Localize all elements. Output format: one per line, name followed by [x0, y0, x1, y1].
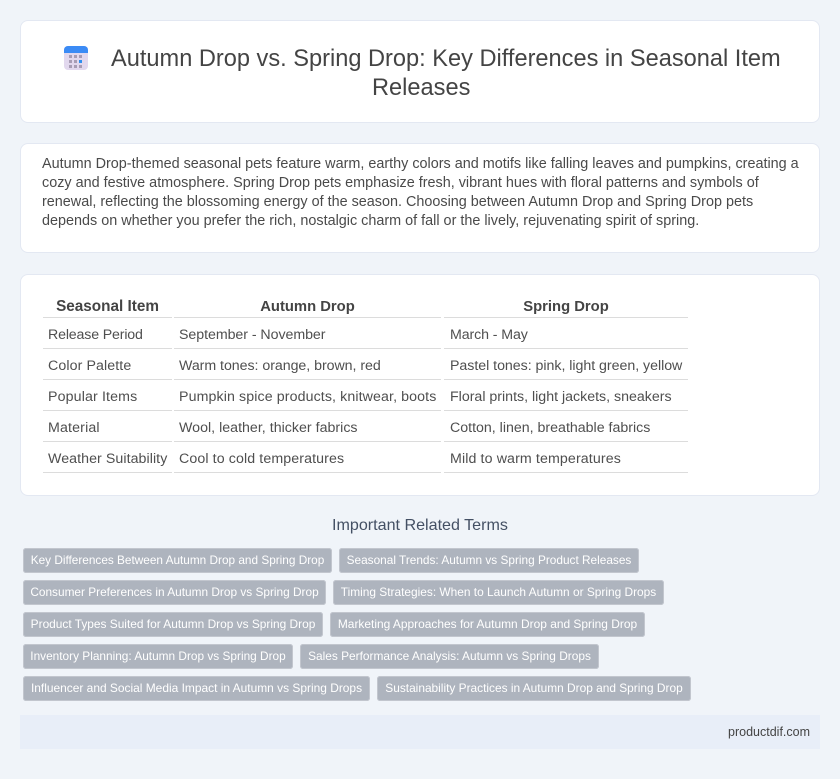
row: Popular Items: Pumpkin spice products, knitwear, boots [179, 389, 436, 405]
row: Material [48, 420, 650, 436]
tag [23, 676, 370, 701]
row: Release Period [48, 327, 528, 343]
tag [23, 644, 293, 669]
row: Color Palette: Warm tones: orange, brown, red [179, 358, 381, 374]
row: Material: Cotton, linen, breathable fabrics [450, 420, 650, 436]
footer bar [20, 715, 820, 749]
row: Color Palette: Pastel tones: pink, light green, yellow [450, 358, 682, 374]
header: Autumn Drop: Autumn Drop [260, 299, 355, 315]
icon: calendar [64, 46, 88, 70]
tag [377, 676, 691, 701]
row: Release Period: Release Period [48, 327, 143, 343]
header: Spring Drop: Spring Drop [523, 299, 609, 315]
tag [339, 548, 639, 573]
row: Material: Material [48, 420, 100, 436]
row: Material: Wool, leather, thicker fabrics [179, 420, 358, 436]
tag [330, 612, 645, 637]
title: Releases [372, 75, 470, 101]
row: Weather Suitability [48, 451, 621, 467]
tag [23, 612, 323, 637]
row: Color Palette [48, 358, 682, 374]
tag: Consumer Preferences in Autumn Drop vs Spring Drop [30, 585, 319, 599]
text block: description [42, 156, 799, 229]
text block: description: renewal, reflecting the blossoming energy of the season. Choosing between Autumn Drop and Spring Drop pets [42, 194, 753, 210]
panel: comparison table [20, 274, 820, 496]
panel: title card [20, 20, 820, 123]
panel: description [20, 143, 820, 253]
tag: Key Differences Between Autumn Drop and Spring Drop [31, 553, 324, 567]
text block: description: Autumn Drop-themed seasonal pets feature warm, earthy colors and motifs like falling leaves and pumpkins, creating a [42, 156, 799, 172]
footer text: productdif.com [728, 725, 810, 739]
row: Release Period: March - May [450, 327, 528, 343]
tag [333, 580, 664, 605]
tag: Sales Performance Analysis: Autumn vs Spring Drops [308, 649, 591, 663]
tag [300, 644, 599, 669]
tag: Timing Strategies: When to Launch Autumn or Spring Drops [341, 585, 656, 599]
text block: description: depends on whether you prefer the rich, nostalgic charm of fall or the lively, rejuvenating spirit of spring. [42, 213, 699, 229]
title [111, 46, 781, 101]
table: comparison [43, 298, 688, 473]
row: Popular Items: Popular Items [48, 389, 137, 405]
row: Weather Suitability: Cool to cold temperatures [179, 451, 344, 467]
row: Color Palette: Color Palette [48, 358, 131, 374]
tag: Sustainability Practices in Autumn Drop and Spring Drop [385, 681, 683, 695]
related term tags [23, 548, 691, 701]
row: Weather Suitability: Weather Suitability [48, 451, 167, 467]
tag: Product Types Suited for Autumn Drop vs Spring Drop [31, 617, 315, 631]
tag: Marketing Approaches for Autumn Drop and Spring Drop [338, 617, 637, 631]
heading: related terms: Important Related Terms [332, 516, 508, 534]
row: Popular Items [48, 389, 672, 405]
tag [23, 548, 332, 573]
tag: Influencer and Social Media Impact in Autumn vs Spring Drops [31, 681, 362, 695]
tag: Seasonal Trends: Autumn vs Spring Product Releases [347, 553, 631, 567]
row: Weather Suitability: Mild to warm temperatures [450, 451, 621, 467]
text block: description: cozy and festive atmosphere. Spring Drop pets emphasize fresh, vibrant hues with floral patterns and symbols of [42, 175, 759, 191]
title: Autumn Drop vs. Spring Drop: Key Differences in Seasonal Item [111, 46, 781, 72]
row: Release Period: September - November [179, 327, 325, 343]
header: Seasonal Item: Seasonal Item [56, 298, 159, 315]
row: Popular Items: Floral prints, light jackets, sneakers [450, 389, 672, 405]
tag [23, 580, 326, 605]
tag: Inventory Planning: Autumn Drop vs Spring Drop [30, 649, 286, 663]
